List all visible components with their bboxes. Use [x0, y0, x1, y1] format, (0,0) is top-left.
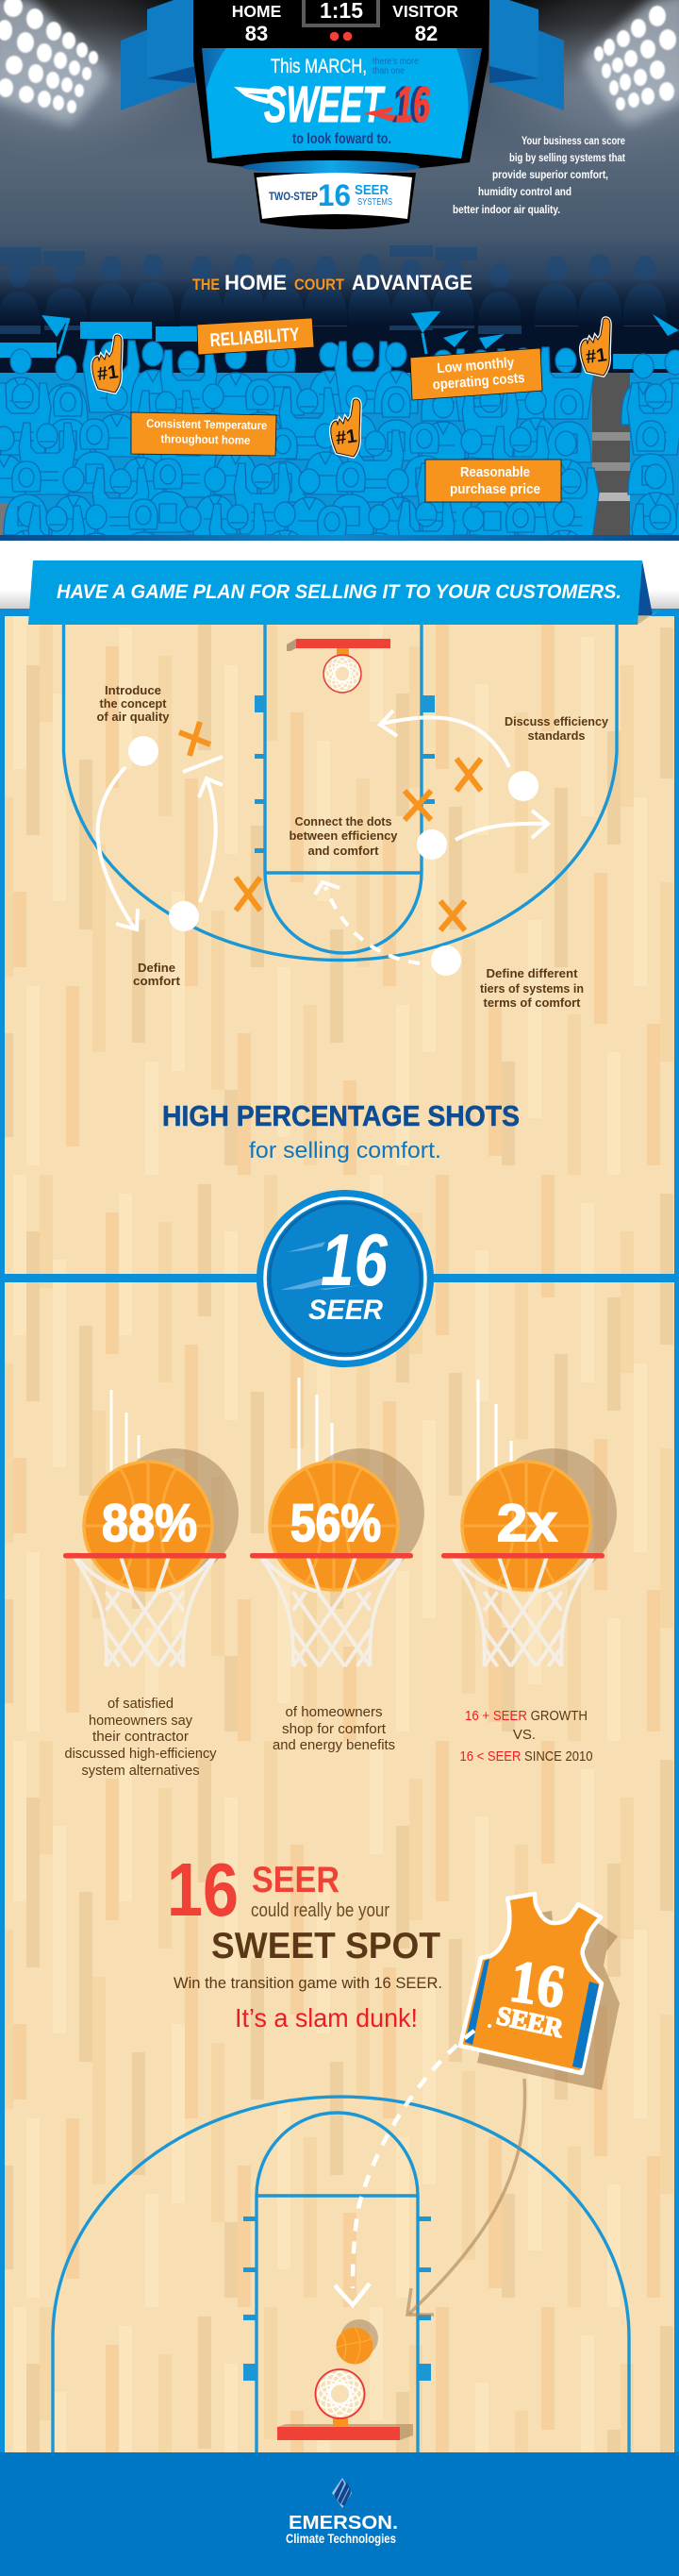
sweet spot message: SEER [252, 1860, 340, 1900]
scoreboard [193, 0, 489, 172]
description: shop for comfort [282, 1722, 386, 1737]
court lines [64, 618, 617, 961]
intro text: better indoor air quality. [453, 203, 560, 216]
sign: reasonable purchase price [425, 460, 561, 502]
sign: consistent temperature: Consistent Temperature [146, 417, 267, 432]
net [75, 1558, 215, 1666]
signs and pennants held by fans [0, 310, 679, 369]
heading: home court advantage: ADVANTAGE [352, 271, 472, 294]
stadium background [0, 0, 679, 535]
fans row 1 [0, 341, 679, 427]
fans row 5 [15, 498, 679, 535]
play labels: Connect the dots [294, 815, 392, 828]
heading: home court advantage: THE [192, 276, 220, 293]
sweet spot message: SWEET SPOT [211, 1926, 440, 1966]
description: homeowners say [89, 1714, 193, 1729]
heading: high percentage shots: for selling comfort. [249, 1138, 441, 1163]
foam finger 2 [581, 318, 610, 376]
play labels: and comfort [307, 845, 379, 858]
sweet spot message: could really be your [251, 1900, 389, 1921]
banner: game plan [28, 560, 660, 625]
description: of satisfied [108, 1697, 174, 1712]
game plan court diagram [64, 618, 617, 1010]
foam finger 3 [331, 399, 360, 457]
jersey body [460, 1894, 602, 2073]
basketball [462, 1448, 617, 1590]
play labels: standards [528, 729, 586, 743]
sign: consistent temperature [131, 412, 276, 456]
description: and energy benefits [273, 1738, 395, 1753]
stat: 88 percent [63, 1390, 239, 1779]
motion streaks [299, 1378, 332, 1472]
jersey number: SEER [494, 2001, 566, 2044]
crowd base band [0, 535, 679, 541]
description [273, 1705, 395, 1753]
jersey side stripes [465, 1959, 599, 2068]
fans row 2 [0, 379, 679, 464]
emerson wordmark [286, 2513, 398, 2546]
lane ticks [255, 695, 435, 853]
rim [63, 1553, 226, 1559]
possession dots [330, 32, 352, 41]
sweet spot message: 16 [167, 1848, 239, 1932]
description: their contractor [92, 1730, 189, 1745]
two-step sign: 16 [318, 178, 351, 212]
play labels: Discuss efficiency [505, 715, 608, 728]
play labels: of air quality [96, 711, 170, 724]
player dots [128, 736, 538, 976]
two-step sign: TWO-STEP [269, 192, 318, 203]
rim [441, 1553, 604, 1559]
shadow arrow to hoop [407, 2079, 525, 2315]
value: 88% [102, 1493, 197, 1552]
play labels: between efficiency [289, 829, 398, 843]
play labels [96, 684, 608, 1010]
description: 16 + SEER GROWTH [465, 1708, 588, 1724]
blue screen: SWEET [264, 76, 386, 133]
badge: 16 seer: SEER [308, 1295, 383, 1326]
heading: high percentage shots [162, 1099, 520, 1163]
visitor score: 82 [415, 22, 438, 45]
sign: reliability [197, 318, 314, 355]
motion streaks [111, 1390, 139, 1472]
jersey shadow [477, 1911, 620, 2090]
play labels: Define different [487, 967, 578, 980]
visitor score [392, 2, 458, 45]
sweet spot message: Win the transition game with 16 SEER. [174, 1974, 442, 1992]
sign: reliability: RELIABILITY [209, 325, 301, 351]
stat: 56 percent [250, 1378, 424, 1753]
rim [250, 1553, 413, 1559]
fans row 4 [4, 459, 677, 540]
two-step sign [242, 160, 420, 229]
heading: high percentage shots: HIGH PERCENTAGE SHOTS [162, 1099, 520, 1132]
footer [0, 2452, 679, 2576]
floodlight left [0, 0, 108, 125]
description: 16 < SEER SINCE 2010 [460, 1748, 592, 1765]
emerson wordmark: EMERSON. [289, 2513, 398, 2534]
value: 56% [290, 1493, 381, 1552]
heading: home court advantage [192, 271, 472, 294]
two-step sign: SYSTEMS [357, 197, 392, 208]
home score: HOME [232, 2, 281, 21]
visitor score: VISITOR [392, 2, 458, 21]
value: 2x [497, 1493, 557, 1552]
jersey number [494, 1947, 570, 2044]
basketball [270, 1448, 424, 1590]
net [262, 1558, 402, 1666]
play labels: comfort [133, 975, 181, 988]
background crowd silhouette [0, 245, 667, 334]
lower court lines [53, 2097, 629, 2452]
description [64, 1697, 217, 1779]
wall shadow [0, 590, 679, 609]
motion streaks [478, 1380, 511, 1481]
emerson wordmark: Climate Technologies [286, 2531, 396, 2546]
description [460, 1708, 592, 1765]
backboard and hoop [287, 639, 390, 693]
play labels: terms of comfort [483, 996, 581, 1010]
blue screen: 16 [392, 76, 427, 133]
description: of homeowners [285, 1705, 383, 1720]
intro text: humidity control and [478, 185, 571, 198]
sign: consistent temperature: throughout home [160, 432, 251, 447]
sign: reasonable purchase price: Reasonable [460, 464, 530, 480]
sign: low monthly operating costs: operating costs [432, 370, 525, 393]
intro text: Your business can score [522, 134, 625, 147]
blue screen: to look foward to. [292, 131, 391, 147]
play labels: Define [138, 962, 175, 975]
foam finger 1 [92, 335, 122, 393]
sign: reasonable purchase price: purchase price [450, 481, 540, 497]
banner: game plan: HAVE A GAME PLAN FOR SELLING IT TO YOUR CUSTOMERS. [57, 581, 621, 603]
ribbons behind scoreboard [121, 0, 564, 110]
crowd fill and stairs [0, 373, 679, 535]
net [453, 1558, 592, 1666]
heading: home court advantage: HOME [224, 271, 287, 294]
sweet spot message [167, 1848, 442, 2032]
stat: 2x [441, 1380, 617, 1765]
badge: 16 seer [257, 1190, 434, 1367]
sign: low monthly operating costs [410, 348, 542, 400]
blue screen: 16 [396, 76, 431, 133]
small basketball [336, 2319, 378, 2365]
emerson logo mark [332, 2478, 352, 2508]
heading: home court advantage: COURT [294, 276, 345, 293]
description: discussed high-efficiency [64, 1747, 217, 1762]
jersey number: 16 [505, 1947, 570, 2021]
jersey [460, 1894, 620, 2090]
blue screen: This MARCH, [271, 56, 367, 77]
play labels: tiers of systems in [480, 982, 584, 995]
lower hoop and backboard [277, 2369, 413, 2440]
two-step sign: SEER [355, 182, 389, 198]
center court line [5, 1274, 674, 1282]
blue screen: there's more [373, 56, 419, 67]
intro text: provide superior comfort, [492, 168, 608, 181]
intro text: big by selling systems that [509, 151, 625, 164]
game clock [302, 0, 380, 27]
sign: low monthly operating costs: Low monthly [437, 355, 515, 376]
blue screen [202, 48, 482, 159]
dashed shot arrow [335, 2024, 491, 2305]
intro text [453, 134, 625, 216]
play labels: the concept [100, 697, 167, 711]
description: system alternatives [81, 1764, 200, 1779]
blue screen: than one [373, 65, 405, 76]
badge: 16 seer: 16 [321, 1218, 389, 1301]
play labels: Introduce [105, 684, 161, 697]
play arrows [98, 711, 548, 963]
defender x marks [179, 722, 481, 930]
fans row 3 [0, 419, 673, 502]
basketball [84, 1448, 239, 1590]
sweet spot message: It’s a slam dunk! [235, 2003, 418, 2032]
blue crowd illustration [0, 311, 679, 535]
floodlight right [584, 0, 679, 124]
home score: 83 [245, 22, 268, 45]
lower lane ticks [243, 2216, 431, 2381]
home score [232, 2, 281, 45]
wood floor [0, 609, 679, 2452]
description: VS. [513, 1727, 536, 1743]
